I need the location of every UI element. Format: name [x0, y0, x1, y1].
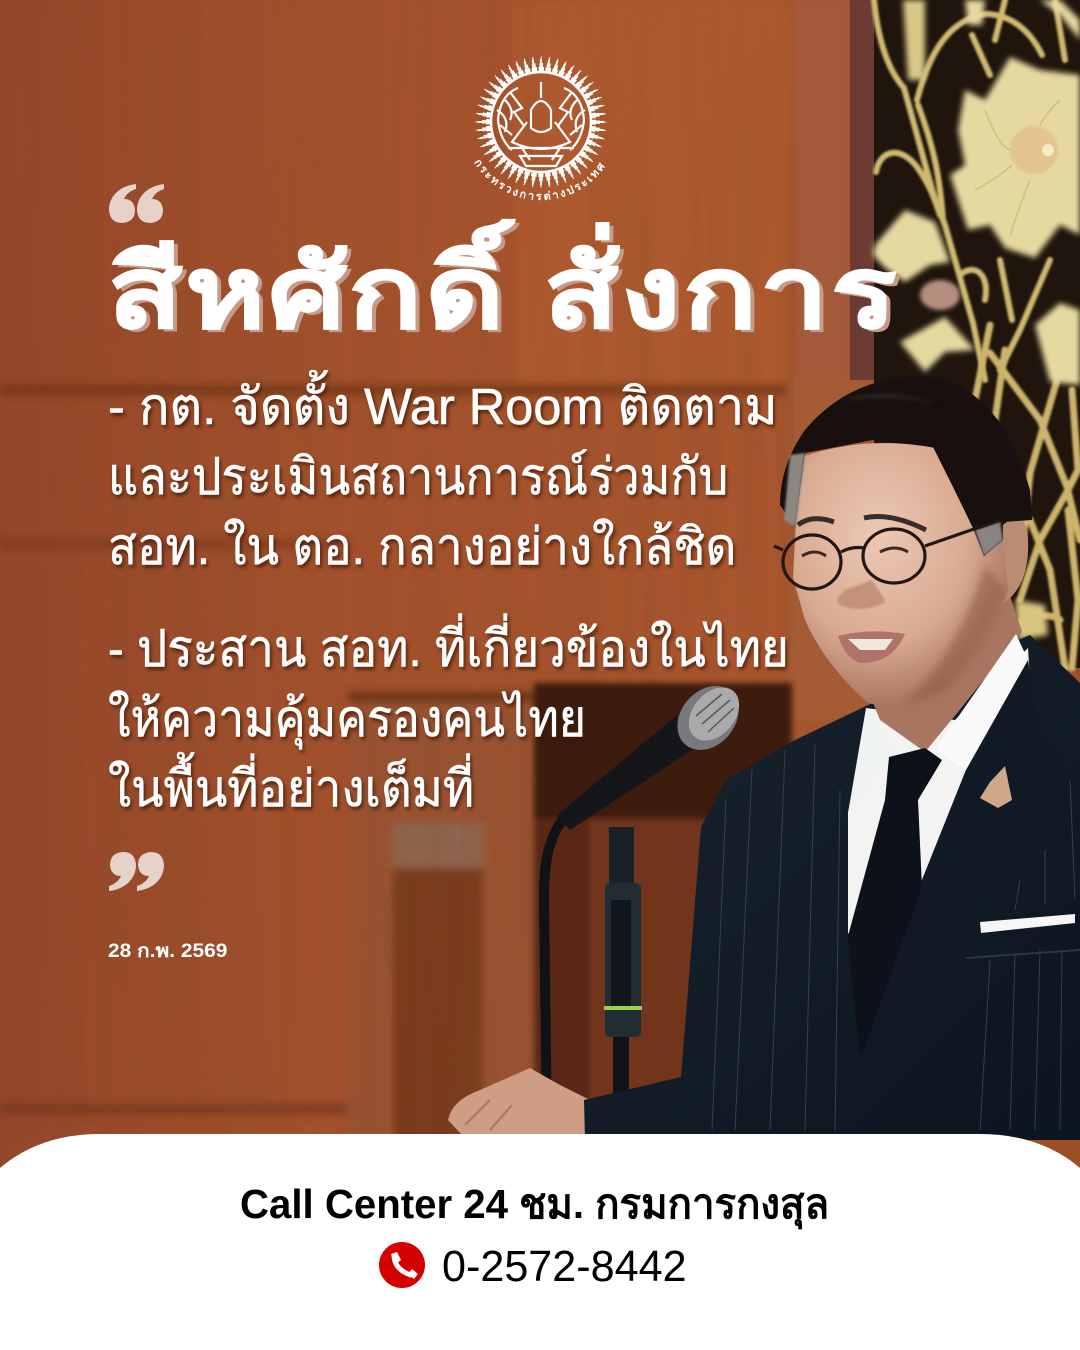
bottom white panel	[0, 1134, 1080, 1350]
icon: phone	[379, 1242, 425, 1288]
text block: second point: ในพื้นที่อย่างเต็มที่	[108, 760, 474, 817]
icon: opening quote	[109, 184, 164, 223]
title: สีหศักดิ์ สั่งการ	[108, 237, 900, 349]
emblem	[474, 56, 606, 200]
pocket square	[980, 914, 1075, 933]
call center heading: Call Center 24 ชม. กรมการกงสุล	[240, 1181, 829, 1227]
nose and mouth	[837, 580, 886, 609]
jaw shadow	[905, 565, 1006, 702]
text block: second point: - ประสาน สอท. ที่เกี่ยวข้องในไทย	[108, 620, 789, 677]
speaker	[448, 376, 1080, 1140]
pocket line	[966, 950, 1080, 958]
face	[793, 443, 1008, 706]
glasses	[774, 520, 1000, 589]
eyes	[802, 548, 908, 556]
shirt	[848, 648, 1030, 950]
pin	[980, 766, 1012, 808]
brows	[798, 516, 926, 530]
ear	[1003, 518, 1028, 604]
microphone stand	[544, 674, 751, 1137]
right lapel	[848, 660, 1064, 1095]
phone number: 0-2572-8442	[442, 1242, 687, 1291]
icon: closing quote	[109, 852, 164, 891]
suit	[584, 635, 1080, 1140]
text block: first point	[108, 370, 778, 575]
hand	[448, 1068, 595, 1135]
text block: first point: - กต. จัดตั้ง War Room ติดตาม	[108, 378, 778, 435]
text block: first point: สอท. ใน ตอ. กลางอย่างใกล้ชิด	[108, 518, 736, 575]
text block: second point	[108, 613, 789, 817]
neck	[868, 590, 1022, 752]
text block: first point: และประเมินสถานการณ์ร่วมกับ	[108, 448, 728, 505]
emblem: กระทรวงการต่างประเทศ	[474, 160, 606, 200]
flower petals	[950, 57, 1080, 258]
hair	[780, 376, 1032, 556]
gold lattice	[873, 0, 1080, 668]
date: 28 ก.พ. 2569	[108, 941, 227, 962]
collar	[935, 634, 1028, 770]
tie	[848, 748, 942, 1060]
text block: second point: ให้ความคุ้มครองคนไทย	[108, 690, 586, 747]
